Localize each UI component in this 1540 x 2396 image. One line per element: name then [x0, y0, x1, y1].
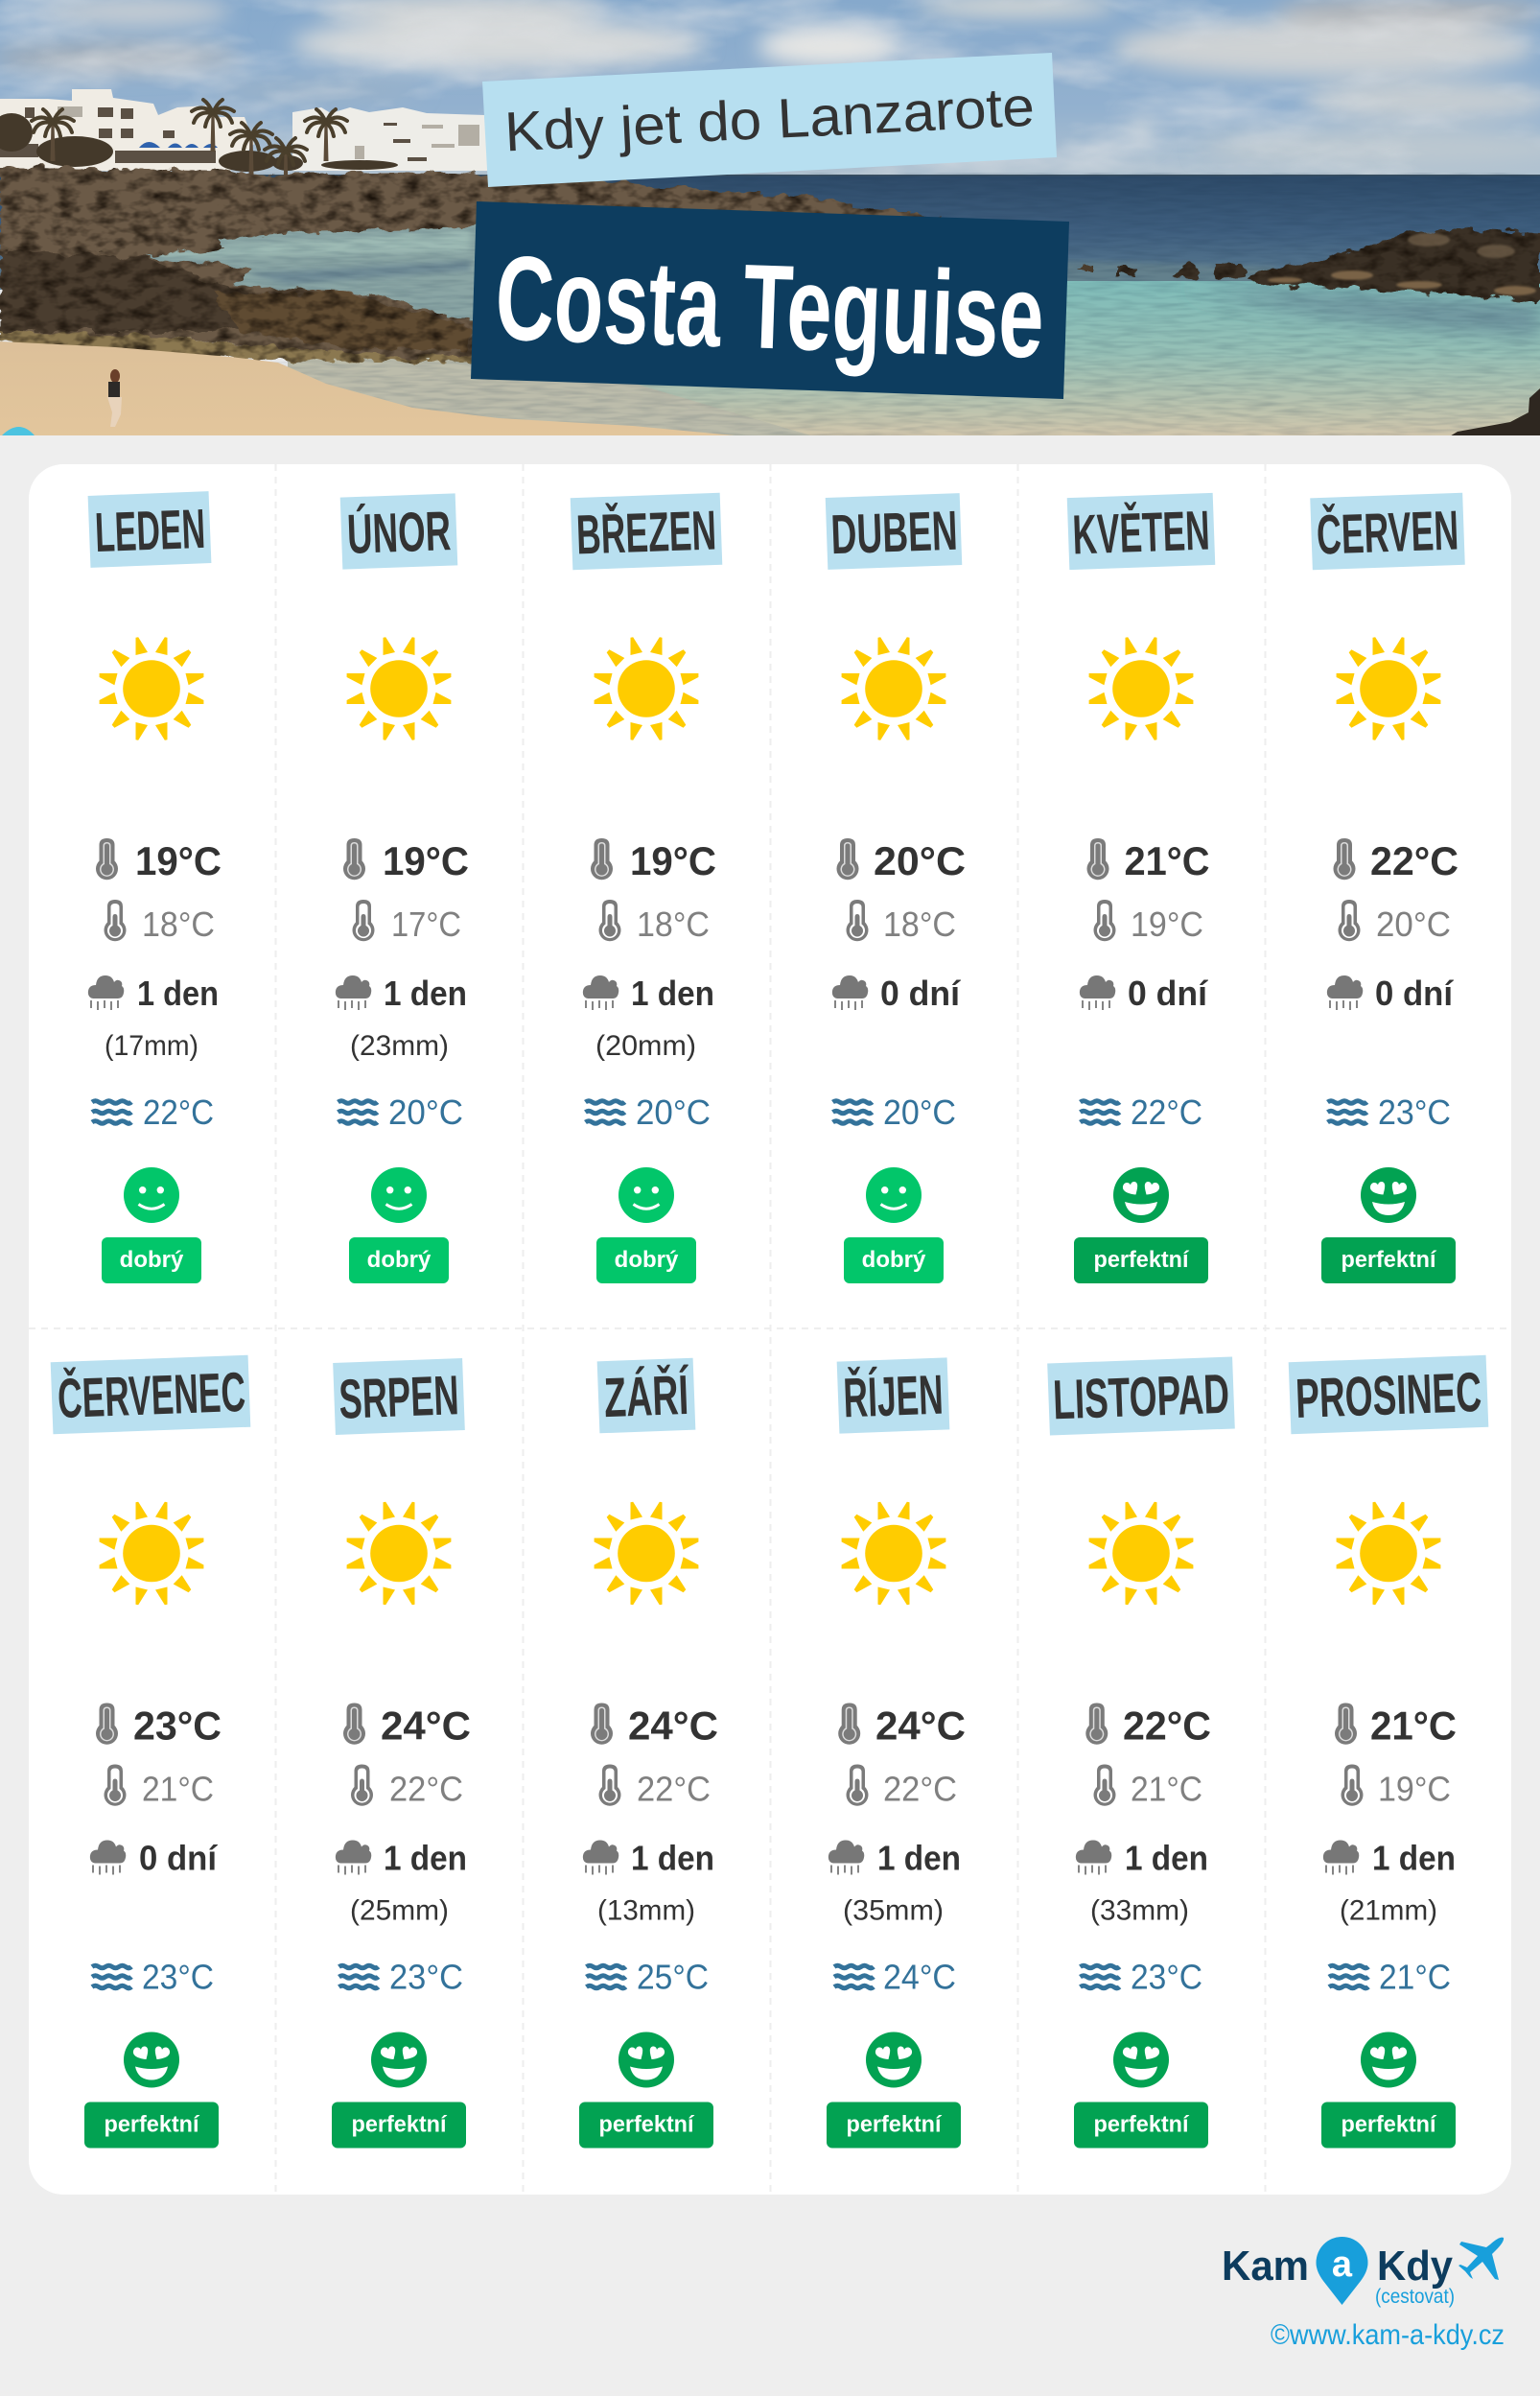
month label: Leden: LEDEN	[94, 498, 206, 564]
panel: first row, January to June	[88, 491, 1465, 1283]
icon: sun	[1089, 637, 1193, 740]
icon: rain cloud	[1327, 975, 1363, 1010]
panel: Srpen	[332, 1358, 471, 2149]
rain days: 0 dní	[139, 1838, 218, 1878]
icon: thermometer low	[1339, 900, 1360, 941]
month label: Březen	[571, 493, 722, 570]
month label: Srpen: SRPEN	[338, 1364, 460, 1431]
icon: smiley good	[124, 1167, 179, 1223]
rating badge: perfektní	[1321, 1237, 1456, 1283]
rocky shore	[0, 167, 1540, 363]
icon: sun	[1337, 637, 1440, 740]
icon: thermometer low	[846, 900, 869, 941]
icon: smiley perfect	[124, 2032, 179, 2087]
rain days: 0 dní	[880, 974, 961, 1013]
rain days: 1 den	[384, 1838, 467, 1878]
daytime temperature: 19°C	[135, 838, 222, 883]
panel: Únor	[336, 493, 469, 1283]
icon: thermometer low	[1093, 1765, 1116, 1806]
rating badge: dobrý: dobrý	[615, 1247, 679, 1273]
rain days: 1 den	[384, 974, 467, 1013]
daytime temperature: 24°C	[381, 1703, 471, 1748]
rainfall: (25mm)	[350, 1895, 449, 1926]
icon: rain cloud	[88, 975, 124, 1010]
water temperature: 22°C	[1131, 1092, 1202, 1132]
icon: thermometer high	[838, 1703, 860, 1745]
month label: Březen: BŘEZEN	[575, 499, 717, 567]
icon: rain cloud	[1323, 1840, 1359, 1874]
icon: waves	[1080, 1101, 1120, 1123]
icon: waves	[1329, 1965, 1368, 1988]
icon: thermometer high	[836, 838, 859, 880]
month label: Leden	[88, 491, 211, 568]
night temperature: 19°C	[1131, 904, 1203, 944]
month label: Červenec	[51, 1355, 250, 1434]
rating badge: dobrý	[102, 1237, 201, 1283]
rainfall: (35mm)	[843, 1895, 944, 1926]
icon: thermometer high	[591, 1703, 613, 1745]
night temperature: 22°C	[883, 1769, 957, 1809]
icon: thermometer low	[351, 1765, 373, 1806]
panel: second row, July to December	[51, 1355, 1488, 2149]
month label: Únor: ÚNOR	[346, 500, 452, 566]
panel: Červenec	[51, 1355, 250, 2149]
icon: thermometer high	[1335, 1703, 1357, 1745]
water temperature: 23°C	[1131, 1957, 1202, 1997]
daytime temperature: 19°C	[630, 838, 716, 883]
icon: smiley perfect	[1113, 1167, 1169, 1223]
icon: waves	[338, 1101, 378, 1123]
icon: sun	[1337, 1502, 1440, 1605]
icon: sun	[595, 637, 698, 740]
water temperature: 21°C	[1379, 1957, 1451, 1997]
rain days: 1 den	[1372, 1838, 1456, 1878]
month label: Květen: KVĚTEN	[1071, 500, 1211, 566]
icon: smiley good	[618, 1167, 674, 1223]
water temperature: 20°C	[636, 1092, 711, 1132]
panel: Duben	[826, 493, 966, 1283]
icon: rain cloud	[336, 1840, 371, 1874]
water temperature: 23°C	[1378, 1092, 1451, 1132]
rating badge: perfektní: perfektní	[104, 2112, 200, 2137]
rating badge: perfektní	[579, 2102, 713, 2149]
icon: thermometer low	[598, 900, 621, 941]
icon: waves	[92, 1965, 131, 1988]
icon: thermometer low	[104, 1765, 127, 1806]
palm trees	[0, 113, 398, 172]
icon: thermometer low	[846, 1765, 869, 1806]
rain days: 1 den	[1125, 1838, 1208, 1878]
night temperature: 18°C	[637, 904, 710, 944]
daytime temperature: 22°C	[1123, 1703, 1211, 1748]
icon: thermometer high	[96, 838, 118, 880]
rain days: 1 den	[137, 974, 219, 1013]
icon: sun	[842, 1502, 945, 1605]
night temperature: 18°C	[883, 904, 956, 944]
rainfall: (20mm)	[595, 1030, 696, 1062]
daytime temperature: 19°C	[383, 838, 469, 883]
title banner: Costa Teguise	[471, 201, 1069, 399]
rain days: 0 dní	[1375, 974, 1454, 1013]
daytime temperature: 23°C	[133, 1703, 222, 1748]
icon: sun	[347, 1502, 451, 1605]
icon: rain cloud	[583, 1840, 618, 1874]
rain days: 1 den	[631, 974, 714, 1013]
icon: smiley perfect	[866, 2032, 922, 2087]
month label: Srpen	[333, 1358, 465, 1435]
night temperature: 22°C	[637, 1769, 711, 1809]
rating badge: perfektní: perfektní	[1341, 1247, 1437, 1273]
icon: waves	[1080, 1965, 1120, 1988]
icon: smiley perfect	[1361, 2032, 1416, 2087]
panel: Říjen	[827, 1357, 966, 2149]
daytime temperature: 21°C	[1124, 838, 1210, 883]
logo word: Kam: Kam	[1222, 2243, 1309, 2290]
rating badge: perfektní: perfektní	[1093, 1247, 1190, 1273]
night temperature: 21°C	[1131, 1769, 1202, 1809]
rating badge: dobrý: dobrý	[120, 1247, 184, 1273]
rainfall: (21mm)	[1340, 1895, 1437, 1926]
person on the beach	[107, 369, 122, 427]
title banner: Costa Teguise: Costa Teguise	[494, 231, 1046, 384]
month label: Červenec: ČERVENEC	[57, 1361, 246, 1430]
icon: sun	[1089, 1502, 1193, 1605]
month label: Září: ZÁŘÍ	[603, 1364, 690, 1429]
icon: smiley good	[866, 1167, 922, 1223]
month label: Říjen	[837, 1357, 949, 1434]
month label: Září	[597, 1358, 695, 1433]
icon: waves	[92, 1101, 131, 1123]
icon: waves	[587, 1965, 625, 1988]
rating badge: perfektní	[1074, 1237, 1208, 1283]
buildings	[0, 89, 254, 171]
daytime temperature: 20°C	[874, 838, 966, 883]
logo word: Kdy: Kdy	[1377, 2243, 1454, 2290]
icon: thermometer high	[1087, 838, 1108, 880]
rating badge: dobrý: dobrý	[367, 1247, 432, 1273]
water temperature: 20°C	[388, 1092, 463, 1132]
rainfall: (13mm)	[597, 1895, 695, 1926]
icon: smiley perfect	[618, 2032, 674, 2087]
month label: Listopad	[1047, 1356, 1235, 1436]
icon: thermometer high	[1333, 838, 1356, 880]
panel: Březen	[571, 493, 722, 1283]
rating badge: perfektní: perfektní	[351, 2112, 448, 2137]
icon: smiley perfect	[1113, 2032, 1169, 2087]
subtitle banner: Kdy jet do Lanzarote	[482, 53, 1057, 187]
night temperature: 19°C	[1378, 1769, 1451, 1809]
icon: rain cloud	[583, 975, 618, 1010]
icon: thermometer high	[343, 1703, 365, 1745]
icon: rain cloud	[832, 975, 868, 1010]
daytime temperature: 24°C	[875, 1703, 966, 1748]
icon: rain cloud	[1076, 1840, 1111, 1874]
icon: waves	[832, 1101, 873, 1123]
rain days: 1 den	[877, 1838, 961, 1878]
icon: thermometer high	[591, 838, 613, 880]
icon: map pin with letter a	[1316, 2237, 1367, 2305]
water temperature: 20°C	[883, 1092, 956, 1132]
night temperature: 21°C	[142, 1769, 214, 1809]
website credit: ©www.kam-a-kdy.cz	[1271, 2319, 1505, 2351]
icon: sun	[842, 637, 945, 740]
rating badge: dobrý	[596, 1237, 696, 1283]
month label: Říjen: ŘÍJEN	[842, 1364, 945, 1429]
icon: sun	[595, 1502, 698, 1605]
panel: Prosinec	[1289, 1355, 1488, 2149]
month label: Listopad: LISTOPAD	[1052, 1363, 1230, 1431]
subtitle banner: Kdy jet do Lanzarote: Kdy jet do Lanzarote	[503, 76, 1036, 163]
icon: airplane	[1458, 2238, 1504, 2280]
night temperature: 17°C	[391, 904, 461, 944]
water temperature: 22°C	[143, 1092, 214, 1132]
icon: smiley good	[371, 1167, 427, 1223]
water temperature: 23°C	[142, 1957, 214, 1997]
icon: thermometer low	[1341, 1765, 1364, 1806]
icon: thermometer low	[353, 900, 374, 941]
panel: Listopad	[1047, 1356, 1235, 2149]
month label: Duben	[826, 493, 962, 570]
rain days: 0 dní	[1128, 974, 1208, 1013]
rating badge: perfektní	[1074, 2102, 1208, 2149]
icon: rain cloud	[90, 1840, 126, 1874]
rating badge: dobrý	[844, 1237, 944, 1283]
sand beach	[0, 341, 735, 435]
icon: thermometer high	[343, 838, 365, 880]
icon: waves	[1327, 1101, 1367, 1123]
icon: thermometer high	[96, 1703, 118, 1745]
icon: thermometer low	[1093, 900, 1116, 941]
rating badge: perfektní	[827, 2102, 961, 2149]
icon: sun	[100, 637, 203, 740]
daytime temperature: 24°C	[628, 1703, 718, 1748]
icon: rain cloud	[336, 975, 371, 1010]
panel: Květen	[1067, 493, 1215, 1283]
panel: Září	[579, 1358, 718, 2149]
icon: sun	[100, 1502, 203, 1605]
logo tagline: cestovat: (cestovat)	[1375, 2286, 1455, 2308]
rating badge: perfektní	[1321, 2102, 1456, 2149]
night temperature: 22°C	[389, 1769, 463, 1809]
icon: thermometer low	[598, 1765, 621, 1806]
water temperature: 25°C	[637, 1957, 709, 1997]
night temperature: 20°C	[1376, 904, 1451, 944]
rain days: 1 den	[631, 1838, 714, 1878]
icon: waves	[339, 1965, 378, 1988]
rating badge: dobrý: dobrý	[862, 1247, 926, 1273]
icon: sun	[347, 637, 451, 740]
night temperature: 18°C	[142, 904, 215, 944]
icon: thermometer high	[1085, 1703, 1108, 1745]
icon: thermometer low	[104, 900, 127, 941]
rating badge: perfektní: perfektní	[1093, 2112, 1190, 2137]
panel: Červen	[1310, 493, 1465, 1283]
panel: Leden	[88, 491, 222, 1283]
month label: Květen	[1067, 493, 1215, 570]
rating badge: perfektní: perfektní	[598, 2112, 695, 2137]
water temperature: 24°C	[883, 1957, 956, 1997]
rating badge: perfektní	[332, 2102, 466, 2149]
header photo: beach at Costa Teguise	[0, 0, 1540, 451]
icon: rain cloud	[828, 1840, 864, 1874]
icon: waves	[834, 1965, 874, 1988]
icon: waves	[585, 1101, 625, 1123]
month label: Únor	[340, 493, 457, 570]
icon: smiley perfect	[371, 2032, 427, 2087]
rainfall: (17mm)	[105, 1030, 198, 1062]
panel: white monthly climate card	[29, 464, 1511, 2195]
daytime temperature: 21°C	[1370, 1703, 1457, 1748]
icon: map pin with letter a: a	[1332, 2244, 1353, 2285]
rating badge: dobrý	[349, 1237, 449, 1283]
daytime temperature: 22°C	[1370, 838, 1458, 883]
rainfall: (23mm)	[350, 1030, 449, 1062]
logo: Kam a Kdy cestovat	[1222, 2237, 1504, 2308]
month label: Duben: DUBEN	[829, 500, 959, 566]
icon: rain cloud	[1080, 975, 1115, 1010]
rating badge: perfektní: perfektní	[846, 2112, 943, 2137]
rating badge: perfektní: perfektní	[1341, 2112, 1437, 2137]
icon: smiley perfect	[1361, 1167, 1416, 1223]
rainfall: (33mm)	[1090, 1895, 1189, 1926]
month label: Červen	[1310, 493, 1465, 570]
rating badge: perfektní	[84, 2102, 219, 2149]
water temperature: 23°C	[389, 1957, 463, 1997]
